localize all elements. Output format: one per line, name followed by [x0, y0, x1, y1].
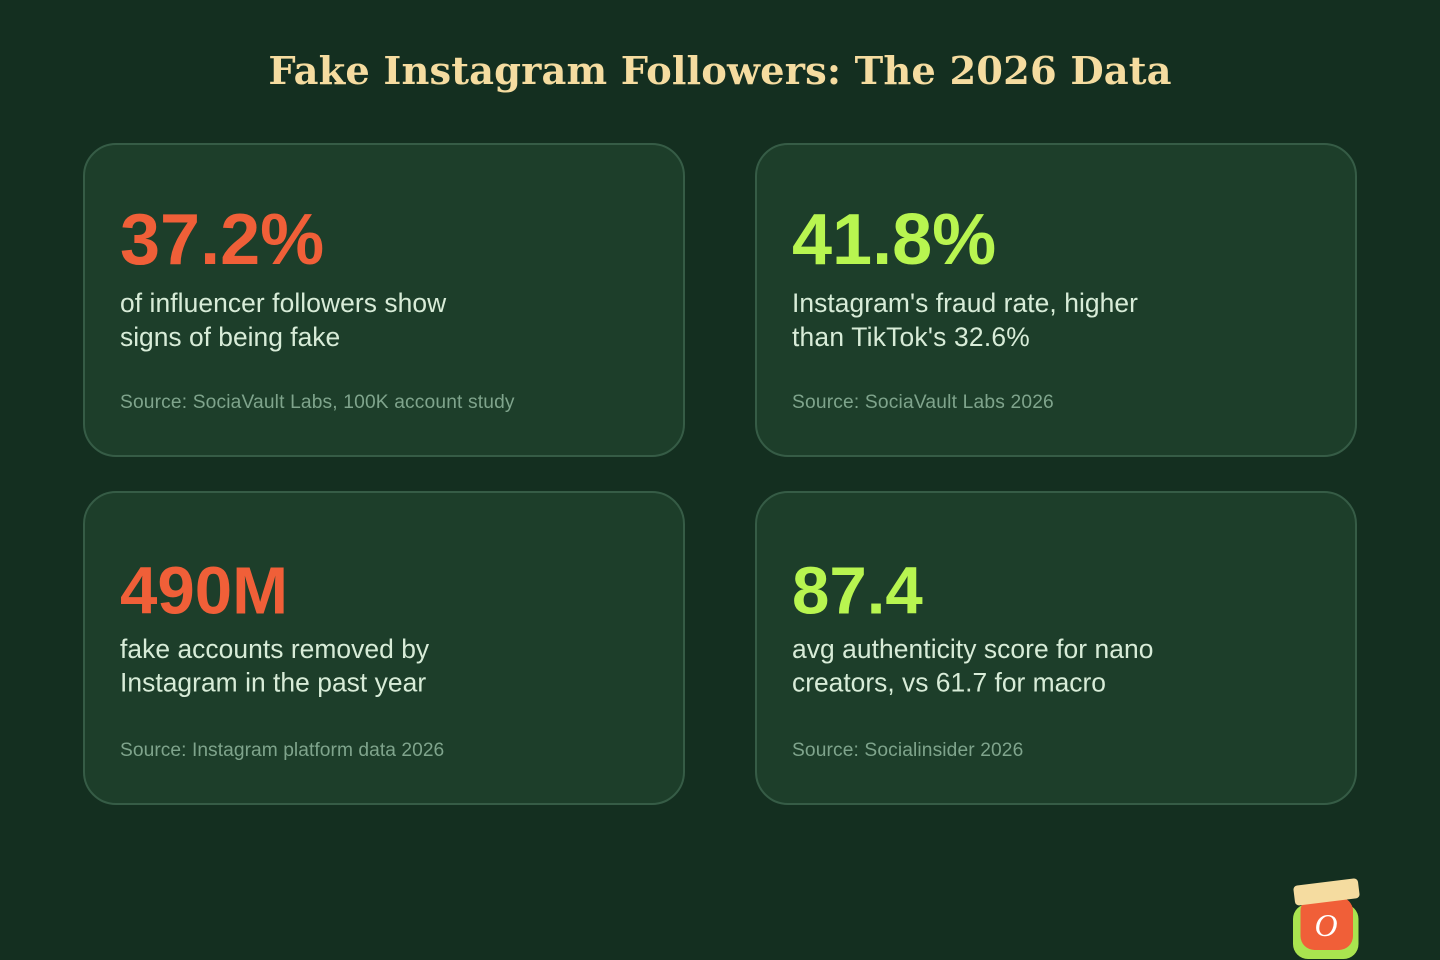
- description: [792, 288, 1138, 352]
- icon: jar logo: [1293, 878, 1360, 959]
- description: than TikTok's 32.6%: [792, 322, 1030, 352]
- icon: jar logo: O: [1314, 907, 1338, 943]
- description: avg authenticity score for nano: [792, 634, 1154, 664]
- source: Source: SociaVault Labs 2026: [792, 393, 1054, 413]
- description: Instagram's fraud rate, higher: [792, 288, 1138, 318]
- source: Source: Instagram platform data 2026: [120, 741, 444, 761]
- description: [120, 634, 429, 698]
- description: of influencer followers show: [120, 288, 446, 318]
- description: signs of being fake: [120, 322, 340, 352]
- title: Fake Instagram Followers: The 2026 Data: [268, 48, 1172, 93]
- description: fake accounts removed by: [120, 634, 429, 664]
- stat number: 41.8%: [792, 199, 996, 280]
- source: Source: SociaVault Labs, 100K account study: [120, 393, 515, 413]
- description: [120, 288, 446, 352]
- description: Instagram in the past year: [120, 668, 426, 698]
- panel: 37.2% stat: [83, 143, 685, 457]
- stat number: 490M: [120, 552, 288, 627]
- panel: 87.4 stat: [755, 491, 1357, 805]
- stat number: 87.4: [792, 552, 923, 627]
- stat number: 37.2%: [120, 199, 324, 280]
- description: creators, vs 61.7 for macro: [792, 668, 1106, 698]
- source: Source: Socialinsider 2026: [792, 741, 1023, 761]
- panel: 490M stat: [83, 491, 685, 805]
- description: [792, 634, 1154, 698]
- panel: 41.8% stat: [755, 143, 1357, 457]
